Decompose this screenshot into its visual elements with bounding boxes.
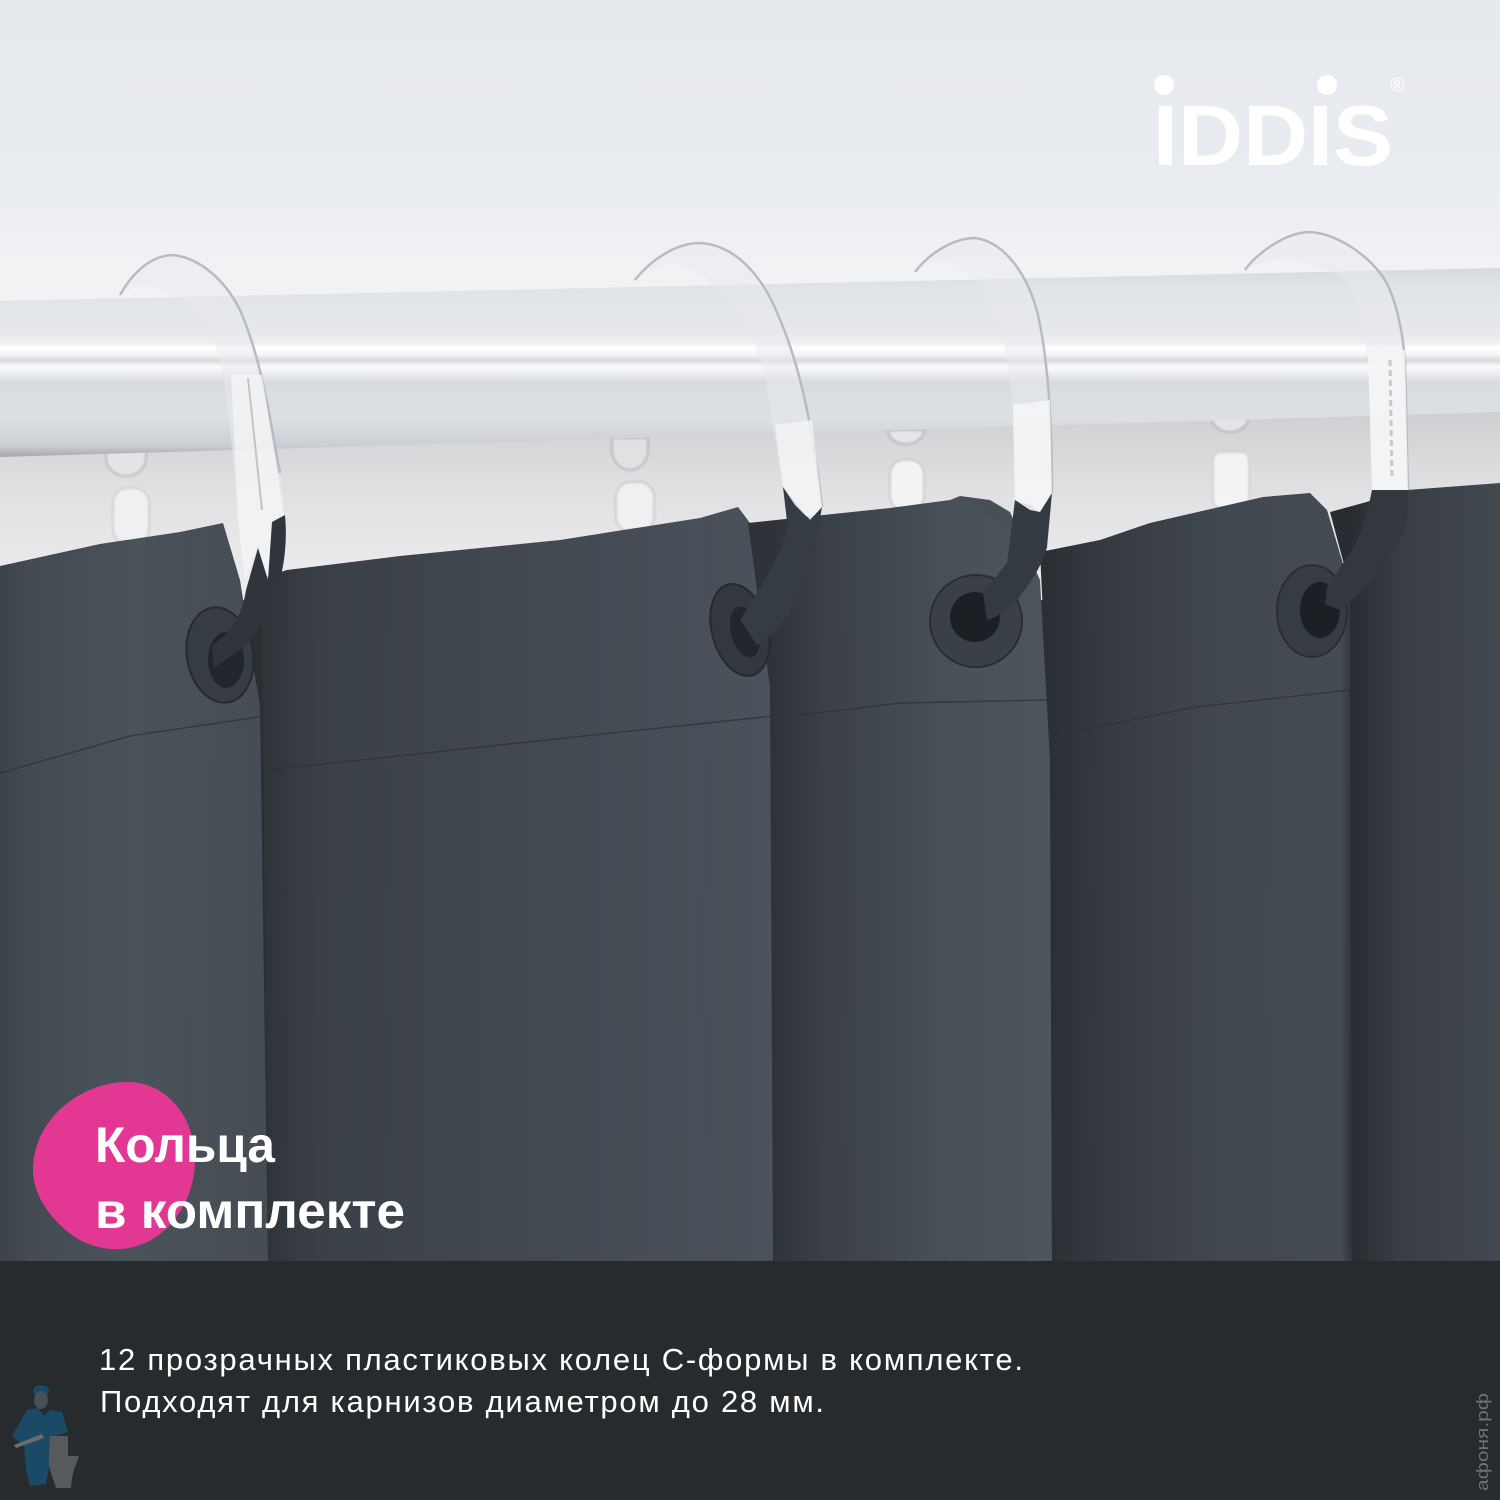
- ring 3: [915, 238, 1052, 620]
- ring pins seen behind the rod: [106, 418, 1249, 544]
- ring 2: [635, 243, 822, 645]
- watermark: афоня.рф: [1473, 1393, 1492, 1491]
- grommet 4: [1277, 565, 1347, 657]
- description text: Подходят для карнизов диаметром до 28 мм.: [100, 1384, 824, 1419]
- icon: plumber with toilet: [12, 1385, 79, 1488]
- curtain panel 3: [748, 496, 1052, 1262]
- heading: в комплекте: [95, 1183, 405, 1239]
- pink blob accent: [33, 1082, 195, 1249]
- curtain panel 5: [1330, 483, 1500, 1262]
- bottom band: [0, 1261, 1500, 1500]
- curtain rod: [0, 268, 1500, 457]
- logo: IDDIS: IDDIS: [1153, 89, 1393, 184]
- curtain panel 2: [262, 507, 773, 1262]
- heading: Кольца: [95, 1117, 276, 1173]
- description text: 12 прозрачных пластиковых колец С-формы в комплекте.: [99, 1342, 1023, 1377]
- logo: IDDIS: ®: [1390, 75, 1405, 97]
- wall background: [0, 0, 1500, 600]
- curtain fabric: [0, 483, 1500, 1262]
- heading: [95, 1117, 405, 1239]
- grommet 3: [930, 575, 1022, 667]
- fabric weave texture: [0, 483, 1500, 1262]
- grommet 2: [701, 577, 779, 683]
- ring 1: [120, 255, 286, 668]
- shaded wall below the rod: [0, 410, 1500, 600]
- curtain panel 4: [1040, 493, 1356, 1262]
- grommet 1: [179, 602, 261, 708]
- description text: [99, 1342, 1023, 1419]
- ring 4: [1245, 232, 1408, 610]
- curtain panel 1: [0, 523, 268, 1262]
- hem stitching: [0, 690, 1350, 773]
